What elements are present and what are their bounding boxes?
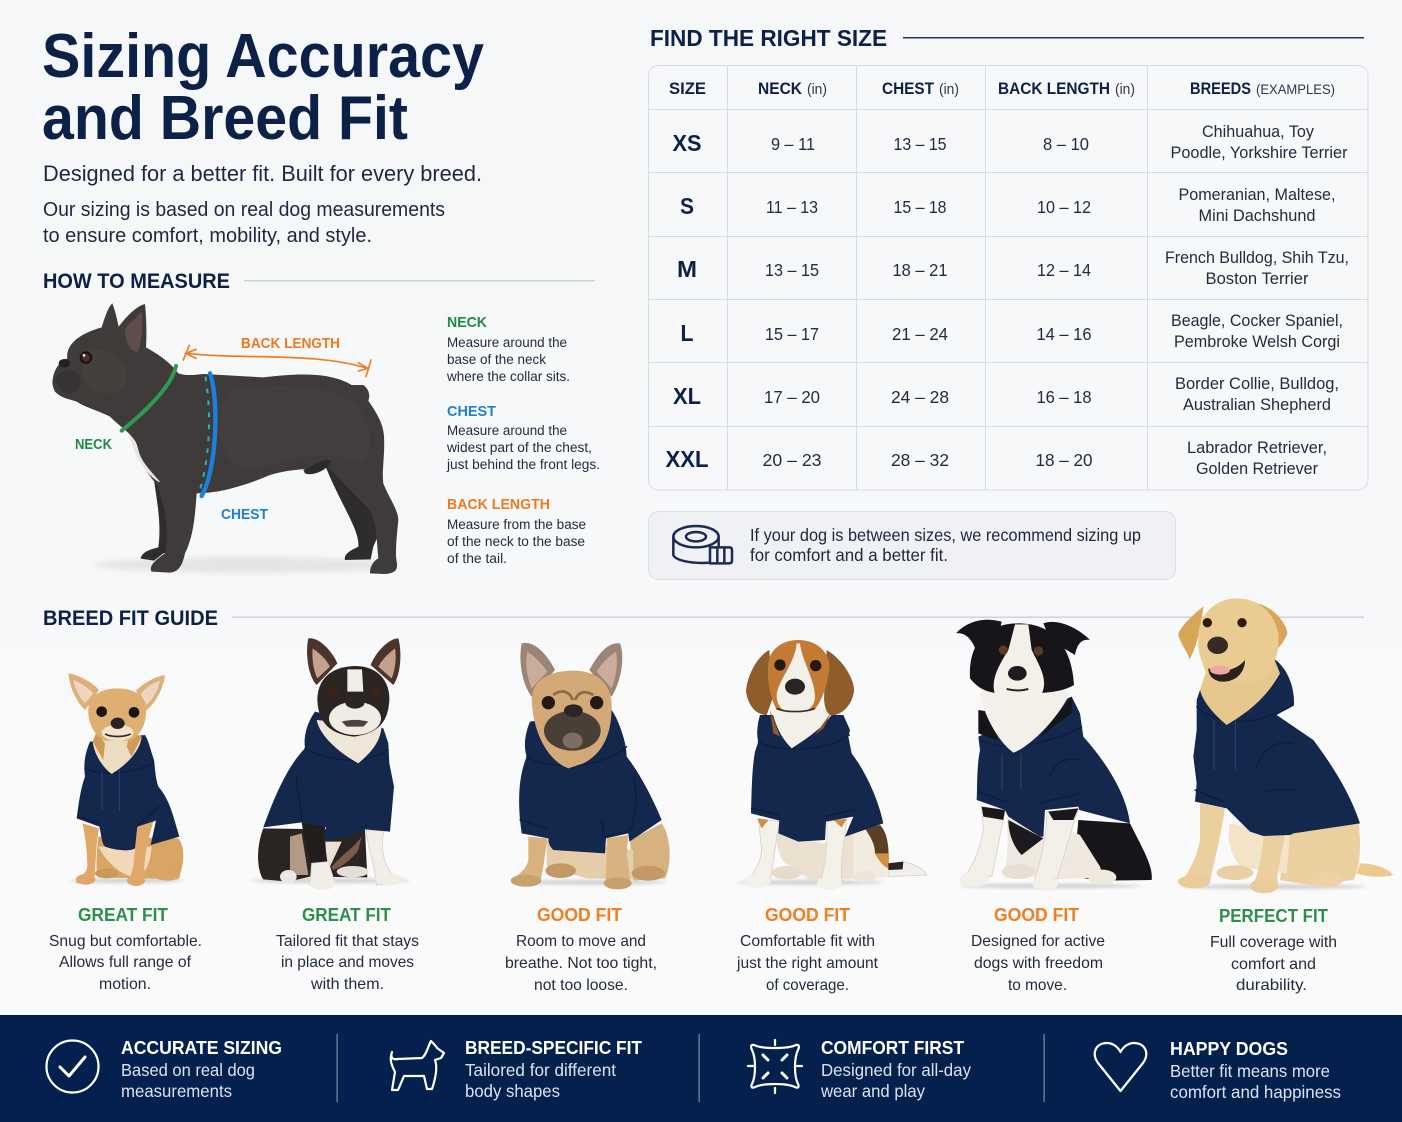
breeds column	[1165, 123, 1349, 478]
footer item: comfort first: Designed for all-day	[821, 1060, 971, 1080]
footer item: comfort first	[748, 1037, 971, 1101]
measurement notes: back length	[447, 496, 586, 566]
neck column: 9 – 11	[771, 134, 815, 154]
breeds column: Golden Retriever	[1196, 460, 1318, 478]
breeds column: Boston Terrier	[1206, 270, 1309, 288]
heading: how to measure: HOW TO MEASURE	[43, 270, 230, 293]
back length column: 10 – 12	[1037, 197, 1091, 217]
measurement notes: chest: Measure around the	[447, 423, 567, 438]
measurement notes: back length: of the tail.	[447, 551, 507, 566]
chest column: 18 – 21	[892, 260, 948, 280]
footer item: comfort first: COMFORT FIRST	[821, 1037, 965, 1058]
size column: XL	[673, 383, 701, 409]
caption: beagle: just the right amount	[736, 955, 879, 972]
breeds column: Pembroke Welsh Corgi	[1174, 333, 1340, 351]
caption: chihuahua: Allows full range of	[59, 954, 192, 971]
caption: border collie: Designed for active	[971, 933, 1105, 950]
breeds column: Border Collie, Bulldog,	[1175, 375, 1339, 393]
size column: M	[677, 256, 697, 282]
back length column: 8 – 10	[1043, 134, 1089, 154]
caption: chihuahua: GREAT FIT	[78, 904, 169, 925]
caption: border collie: GOOD FIT	[994, 904, 1080, 925]
callout text	[750, 525, 1141, 565]
table header: BACK LENGTH	[998, 79, 1110, 98]
measurement notes: chest: CHEST	[447, 403, 496, 420]
measurement notes: neck: Measure around the	[447, 335, 567, 350]
icon: dog outline	[391, 1041, 444, 1090]
far legs	[141, 455, 385, 561]
neck column: 20 – 23	[762, 450, 822, 470]
caption: chihuahua: motion.	[99, 976, 151, 993]
measurement notes: neck: NECK	[447, 314, 487, 331]
callout: sizing tip	[648, 512, 1176, 580]
intro text	[43, 199, 445, 247]
chest strap	[202, 373, 215, 496]
footer item: happy dogs: comfort and happiness	[1170, 1082, 1341, 1102]
breeds column: Pomeranian, Maltese,	[1178, 186, 1336, 204]
measurement notes: neck: where the collar sits.	[446, 369, 570, 384]
icon: measuring tape	[673, 526, 732, 563]
caption: french bulldog	[505, 904, 657, 994]
size column: XS	[672, 130, 702, 156]
table header: (in)	[1115, 81, 1135, 98]
table header: BREEDS	[1190, 79, 1251, 98]
shading	[220, 386, 370, 468]
footer item: accurate sizing	[46, 1037, 282, 1101]
footer item: breed-specific fit: BREED-SPECIFIC FIT	[465, 1037, 643, 1058]
dog label: neck: NECK	[75, 437, 112, 453]
dog 3: french bulldog	[511, 643, 670, 889]
body and head	[52, 303, 398, 574]
footer item: breed-specific fit	[391, 1037, 643, 1101]
back length column: 18 – 20	[1036, 450, 1093, 470]
dog 1: chihuahua	[68, 673, 183, 886]
dog label: back length: BACK LENGTH	[241, 336, 340, 352]
dog 2: boston terrier	[250, 638, 410, 890]
breeds column: Chihuahua, Toy	[1202, 123, 1315, 141]
icon: check circle	[46, 1040, 98, 1092]
neck column: 11 – 13	[766, 197, 818, 217]
neck strap	[122, 366, 176, 431]
back length column: 14 – 16	[1036, 324, 1092, 344]
caption: french bulldog: GOOD FIT	[537, 904, 623, 925]
measurement notes: chest: just behind the front legs.	[446, 457, 600, 472]
title: and Breed Fit	[42, 84, 408, 153]
footer item: breed-specific fit: body shapes	[465, 1081, 560, 1101]
measurement notes: chest: widest part of the chest,	[446, 440, 592, 455]
footer item: happy dogs	[1095, 1038, 1341, 1102]
caption: boston terrier: Tailored fit that stays	[276, 933, 419, 950]
callout text: If your dog is between sizes, we recommend sizing up	[750, 525, 1141, 545]
size table	[648, 66, 1368, 490]
caption: beagle: GOOD FIT	[765, 904, 851, 925]
measurement notes: neck	[446, 314, 570, 384]
chest column	[891, 134, 949, 470]
caption: labrador: comfort and	[1231, 956, 1316, 973]
caption: french bulldog: Room to move and	[516, 933, 646, 950]
nose	[59, 359, 70, 368]
chest column: 21 – 24	[892, 324, 948, 344]
footer banner	[0, 1015, 1402, 1122]
caption: border collie: dogs with freedom	[974, 955, 1103, 972]
caption: border collie	[971, 904, 1105, 994]
caption: labrador: Full coverage with	[1210, 934, 1337, 951]
heading: breed fit guide: BREED FIT GUIDE	[43, 607, 218, 630]
caption: boston terrier	[276, 904, 419, 993]
footer item: happy dogs: Better fit means more	[1170, 1061, 1330, 1081]
back length arrow	[183, 345, 371, 377]
breeds column: French Bulldog, Shih Tzu,	[1165, 249, 1349, 267]
chest column: 28 – 32	[891, 450, 949, 470]
eye	[80, 351, 92, 364]
back length column	[1036, 134, 1093, 470]
measuring dog illustration	[52, 303, 400, 574]
chest column: 15 – 18	[894, 197, 946, 217]
caption: beagle: Comfortable fit with	[740, 933, 875, 950]
caption: boston terrier: in place and moves	[281, 954, 414, 971]
table header	[669, 79, 1335, 98]
neck column: 15 – 17	[765, 324, 819, 344]
breeds column: Mini Dachshund	[1198, 207, 1316, 225]
caption: labrador: durability.	[1236, 977, 1307, 994]
white chest patch	[128, 433, 161, 483]
callout text: for comfort and a better fit.	[750, 545, 948, 565]
footer item: accurate sizing: Based on real dog	[121, 1060, 255, 1080]
back length column: 16 – 18	[1036, 387, 1092, 407]
chest column: 24 – 28	[891, 387, 949, 407]
dog 5: border collie	[956, 620, 1152, 891]
size column: S	[680, 193, 694, 219]
breeds column: Labrador Retriever,	[1187, 439, 1327, 457]
dog 6: labrador	[1178, 598, 1393, 893]
intro text: to ensure comfort, mobility, and style.	[43, 225, 372, 247]
caption: labrador	[1210, 905, 1337, 994]
icon: soft pillow	[748, 1040, 802, 1093]
measurement notes: back length: BACK LENGTH	[447, 496, 550, 513]
back length column: 12 – 14	[1037, 260, 1091, 280]
icon: heart	[1095, 1043, 1146, 1091]
title: Sizing Accuracy	[42, 22, 484, 91]
heading: find the right size: FIND THE RIGHT SIZE	[650, 25, 887, 51]
intro text: Our sizing is based on real dog measurements	[43, 199, 445, 221]
chest column: 13 – 15	[894, 134, 946, 154]
dog 4: beagle	[737, 640, 927, 890]
size column: L	[680, 320, 694, 346]
caption: beagle: of coverage.	[766, 977, 849, 994]
caption: beagle	[736, 904, 879, 994]
caption: boston terrier: with them.	[310, 976, 384, 993]
caption: border collie: to move.	[1008, 977, 1067, 994]
neck column	[762, 134, 822, 470]
caption: french bulldog: not too loose.	[534, 977, 628, 994]
measurement notes: back length: of the neck to the base	[447, 534, 585, 549]
breeds column: Australian Shepherd	[1183, 396, 1331, 414]
caption: chihuahua: Snug but comfortable.	[49, 933, 202, 950]
table header: NECK	[758, 79, 803, 98]
table header: CHEST	[882, 79, 935, 98]
caption: chihuahua	[49, 904, 202, 993]
footer item: happy dogs: HAPPY DOGS	[1170, 1038, 1288, 1059]
measurement notes: chest	[446, 403, 600, 472]
neck column: 13 – 15	[765, 260, 819, 280]
table header: SIZE	[669, 79, 706, 98]
breeds column: Poodle, Yorkshire Terrier	[1170, 144, 1348, 162]
footer item: breed-specific fit: Tailored for different	[465, 1060, 616, 1080]
caption: labrador: PERFECT FIT	[1219, 905, 1329, 926]
caption: boston terrier: GREAT FIT	[302, 904, 392, 925]
ear interior	[125, 312, 142, 352]
tagline: Designed for a better fit. Built for every breed.	[43, 161, 482, 186]
footer item: comfort first: wear and play	[820, 1081, 925, 1101]
table header: (in)	[939, 81, 959, 98]
caption: french bulldog: breathe. Not too tight,	[505, 955, 657, 972]
size column	[666, 130, 708, 472]
breeds column: Beagle, Cocker Spaniel,	[1171, 312, 1343, 330]
title	[42, 22, 484, 153]
measurement notes: back length: Measure from the base	[447, 517, 586, 532]
footer item: accurate sizing: measurements	[121, 1081, 232, 1101]
table header: (in)	[807, 81, 827, 98]
measurement notes: neck: base of the neck	[447, 352, 546, 367]
table header: (EXAMPLES)	[1256, 81, 1335, 97]
size column: XXL	[666, 446, 708, 472]
neck column: 17 – 20	[764, 387, 820, 407]
dog label: chest: CHEST	[221, 507, 268, 523]
footer item: accurate sizing: ACCURATE SIZING	[121, 1037, 282, 1058]
